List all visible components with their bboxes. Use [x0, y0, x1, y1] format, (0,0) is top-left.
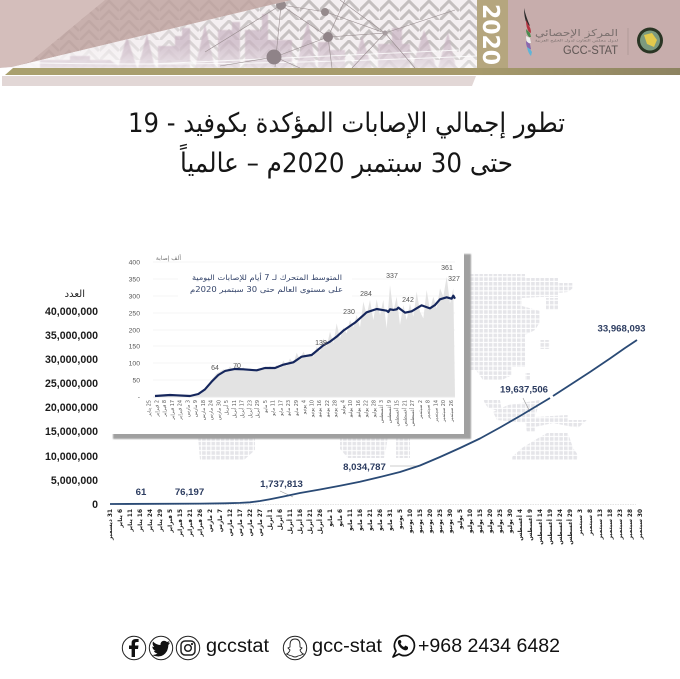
value labels: 8,034,787: [343, 462, 386, 473]
x-axis date labels: 16 أبريل: [296, 509, 304, 534]
x-axis date labels: 13 سبتمبر: [598, 509, 604, 540]
y-axis labels: 40,000,000: [45, 306, 98, 318]
x-axis date labels: 11 يناير: [128, 509, 134, 533]
inset value labels: 139: [315, 340, 327, 347]
x-axis date labels: 19 أغسطس: [546, 509, 554, 545]
x-axis date labels: 1 أبريل: [266, 509, 274, 530]
inset x-axis date labels: 15 أغسطس: [394, 400, 400, 426]
icon: instagram: [176, 636, 200, 660]
inset value labels: 70: [233, 363, 241, 370]
x-axis date labels: 11 أبريل: [286, 509, 294, 534]
inset y-axis labels: 150: [129, 344, 140, 350]
y-axis labels: 20,000,000: [45, 402, 98, 414]
inset x-axis date labels: 9 مارس: [193, 400, 199, 417]
inset x-axis date labels: 3 مارس: [185, 400, 191, 417]
x-axis date labels: 26 فبراير: [198, 509, 204, 538]
logo text: [535, 28, 618, 57]
x-axis date labels: 31 ديسمبر: [108, 509, 114, 541]
title: حتى 30 سبتمبر 2020م – عالمياً: [179, 143, 513, 179]
pale strip under band: [2, 76, 476, 86]
inset x-axis date labels: 29 أبريل: [254, 400, 261, 418]
x-axis date labels: 2 مارس: [208, 509, 214, 532]
dotted world map background: [198, 274, 587, 460]
inset value labels: 327: [448, 276, 460, 283]
leader lines: [280, 398, 530, 497]
value labels: [136, 324, 646, 498]
x-axis date labels: 31 مايو: [388, 509, 394, 532]
x-axis date labels: 21 فبراير: [188, 509, 194, 538]
x-axis date labels: 15 يوليو: [478, 509, 484, 534]
inset unit label: ألف إصابة: [156, 254, 181, 262]
inset x-axis date labels: 4 يونيو: [302, 400, 308, 415]
inset value labels: 242: [402, 297, 414, 304]
inset x-axis date labels: 26 سبتمبر: [449, 400, 455, 423]
inset y-axis labels: 100: [129, 360, 140, 368]
inset title: المتوسط المتحرك لـ 7 أيام للإصابات اليومية: [192, 272, 342, 282]
y-axis labels: 25,000,000: [45, 378, 98, 390]
x-axis date labels: 24 أغسطس: [556, 509, 564, 545]
inset moving average line: [155, 296, 455, 396]
y-axis title: العدد: [65, 289, 85, 300]
inset x-axis date labels: 17 مايو: [278, 400, 284, 417]
x-axis date labels: 30 يوليو: [508, 509, 514, 534]
inset y-axis labels: 250: [129, 310, 140, 318]
inset x-axis date labels: 27 أغسطس: [409, 400, 416, 426]
inset x-axis date labels: 14 سبتمبر: [433, 400, 439, 423]
icon: GCC emblem: [637, 28, 663, 54]
inset value labels: 284: [360, 291, 372, 298]
inset x-axis date labels: 10 يونيو: [309, 400, 315, 418]
value labels: 76,197: [175, 487, 204, 498]
x-axis date labels: 5 فبراير: [168, 509, 174, 534]
inset x-axis date labels: 28 يونيو: [332, 400, 338, 418]
x-axis date labels: 5 يوليو: [458, 509, 464, 530]
x-axis date labels: 18 سبتمبر: [608, 509, 614, 540]
inset y-axis labels: 350: [129, 276, 140, 284]
inset y-axis labels: 400: [129, 260, 140, 266]
inset x-axis date labels: 23 مايو: [286, 400, 292, 417]
x-axis date labels: 23 سبتمبر: [618, 509, 624, 540]
inset x-axis date labels: 20 سبتمبر: [441, 400, 447, 423]
inset y-axis labels: 300: [129, 294, 140, 300]
header banner: [0, 0, 680, 86]
x-axis date labels: 26 أبريل: [316, 509, 324, 534]
inset y-axis labels: [129, 260, 140, 401]
inset grid lines: [153, 262, 455, 380]
inset title: على مستوى العالم حتى 30 سبتمبر 2020م: [190, 285, 343, 294]
inset x-axis date labels: 2 فبراير: [154, 400, 160, 418]
inset x-axis date labels: [146, 400, 455, 426]
inset value labels: 64: [211, 365, 219, 372]
inset y-axis labels: 50: [132, 378, 140, 384]
inset x-axis date labels: 30 مارس: [216, 400, 222, 420]
x-axis date labels: 24 يناير: [148, 509, 154, 533]
inset x-axis date labels: 5 مايو: [263, 400, 269, 414]
x-axis date labels: 10 يونيو: [408, 509, 414, 534]
value labels: 1,737,813: [260, 479, 303, 490]
x-axis date labels: 6 أبريل: [276, 509, 284, 530]
inset x-axis date labels: 11 مايو: [270, 400, 276, 417]
icon: ribbon logo mark: [524, 8, 532, 56]
y-axis labels: 5,000,000: [51, 475, 98, 487]
inset value labels: 230: [343, 309, 355, 316]
x-axis date labels: 1 مايو: [328, 509, 334, 528]
icon: facebook: [122, 636, 146, 660]
x-axis date labels: 16 مايو: [358, 509, 364, 532]
icon: snapchat: [283, 636, 307, 660]
inset x-axis date labels: 4 يوليو: [340, 400, 346, 415]
value labels: 61: [136, 487, 147, 498]
x-axis date labels: 25 يونيو: [438, 509, 444, 534]
x-axis date labels: 27 مارس: [258, 509, 264, 536]
gold year strip: 2020: [477, 4, 503, 65]
inset y-axis labels: -: [138, 394, 140, 401]
x-axis date labels: 21 أبريل: [306, 509, 314, 534]
inset x-axis date labels: 22 يوليو: [364, 400, 370, 418]
x-axis date labels: 15 يونيو: [418, 509, 424, 534]
inset panel: 7-day moving average: [110, 240, 471, 439]
inset daily cases bars: [155, 277, 455, 397]
inset value labels: [211, 265, 460, 372]
x-axis date labels: 3 سبتمبر: [578, 509, 584, 536]
inset x-axis date labels: 22 يونيو: [325, 400, 331, 418]
cumulative curve: [110, 340, 637, 504]
text: phone number: +968 2434 6482: [418, 636, 560, 657]
inset x-axis date labels: 11 أبريل: [231, 400, 238, 418]
y-axis labels: 30,000,000: [45, 354, 98, 366]
value labels: 19,637,506: [500, 384, 548, 396]
inset x-axis date labels: 24 فبراير: [178, 400, 184, 421]
y-axis labels: [45, 306, 98, 511]
x-axis date labels: 22 مارس: [248, 509, 254, 536]
inset title: [190, 272, 343, 294]
inset x-axis date labels: 8 فبراير: [162, 400, 168, 418]
value labels: 33,968,093: [597, 324, 646, 334]
icon: whatsapp: [393, 636, 414, 657]
footer contact bar: [122, 636, 560, 660]
inset x-axis date labels: 9 أغسطس: [386, 400, 393, 423]
x-axis date labels: 8 سبتمبر: [588, 509, 594, 536]
x-axis date labels: 12 مارس: [228, 509, 234, 536]
gold band: [5, 68, 680, 75]
x-axis date labels: 16 يناير: [138, 509, 144, 533]
x-axis date labels: 11 مايو: [348, 509, 354, 532]
x-axis date labels: 6 يناير: [118, 509, 124, 529]
y-axis labels: 35,000,000: [45, 330, 98, 342]
inset x-axis date labels: 3 أغسطس: [378, 400, 385, 423]
inset x-axis date labels: 18 مارس: [201, 400, 207, 420]
x-axis date labels: 30 سبتمبر: [638, 509, 644, 540]
inset x-axis date labels: 29 مايو: [294, 400, 300, 417]
inset x-axis date labels: 16 يوليو: [356, 400, 362, 418]
y-axis labels: 15,000,000: [45, 426, 98, 438]
x-axis date labels: 6 مايو: [338, 509, 344, 528]
y-axis labels: 10,000,000: [45, 451, 98, 463]
banner chevron and skyline artwork: [0, 0, 477, 68]
inset x-axis date labels: 17 أبريل: [238, 400, 246, 418]
chart: cumulative confirmed cases: [45, 289, 646, 545]
inset x-axis date labels: 16 يونيو: [317, 400, 323, 418]
logo text: لدول مجلس التعاون لدول الخليج العربية: [535, 38, 618, 42]
x-axis date labels: 9 أغسطس: [526, 509, 534, 541]
inset x-axis date labels: 8 سبتمبر: [426, 400, 432, 420]
title: تطور إجمالي الإصابات المؤكدة بكوفيد - 19: [128, 108, 565, 139]
x-axis date labels: 14 أغسطس: [536, 509, 544, 545]
x-axis date labels: 25 يوليو: [498, 509, 504, 534]
inset x-axis date labels: 24 مارس: [208, 400, 214, 420]
inset x-axis date labels: 25 يناير: [146, 400, 152, 417]
x-axis date labels: 7 مارس: [218, 509, 224, 532]
x-axis date labels: 10 يوليو: [468, 509, 474, 534]
right logo panel: [508, 0, 680, 68]
title: [128, 108, 565, 179]
y-axis labels: 0: [92, 499, 98, 511]
x-axis date labels: 20 يونيو: [428, 509, 434, 534]
x-axis date labels: 17 مارس: [238, 509, 244, 536]
inset value labels: 361: [441, 265, 453, 272]
inset value labels: 337: [386, 273, 398, 280]
x-axis date labels: [108, 509, 644, 545]
x-axis date labels: 21 مايو: [368, 509, 374, 532]
inset x-axis date labels: 10 يوليو: [348, 400, 354, 418]
inset x-axis date labels: 2 سبتمبر: [418, 400, 424, 420]
x-axis date labels: 4 أغسطس: [516, 509, 524, 541]
inset x-axis date labels: 21 أغسطس: [401, 400, 408, 426]
x-axis date labels: 30 يونيو: [448, 509, 454, 534]
x-axis date labels: 20 يوليو: [488, 509, 494, 534]
inset y-axis labels: 200: [129, 328, 140, 334]
text: gcc-stat: gcc-stat: [312, 636, 383, 657]
x-axis date labels: 29 يناير: [158, 509, 164, 533]
inset x-axis date labels: 17 فبراير: [170, 400, 176, 421]
inset x-axis date labels: 23 أبريل: [246, 400, 253, 418]
inset x-axis date labels: 28 يوليو: [371, 400, 377, 418]
text: gccstat: gccstat: [206, 636, 270, 657]
logo text: GCC-STAT: [563, 45, 618, 57]
icon: twitter: [149, 636, 173, 660]
logo text: المركز الإحصائي: [535, 28, 618, 39]
x-axis date labels: 29 أغسطس: [566, 509, 574, 545]
x-axis date labels: 15 فبراير: [178, 509, 184, 538]
x-axis date labels: 26 مايو: [378, 509, 384, 532]
x-axis date labels: 5 يونيو: [398, 509, 404, 530]
x-axis date labels: 28 سبتمبر: [628, 509, 634, 540]
inset x-axis date labels: 5 أبريل: [223, 400, 230, 415]
